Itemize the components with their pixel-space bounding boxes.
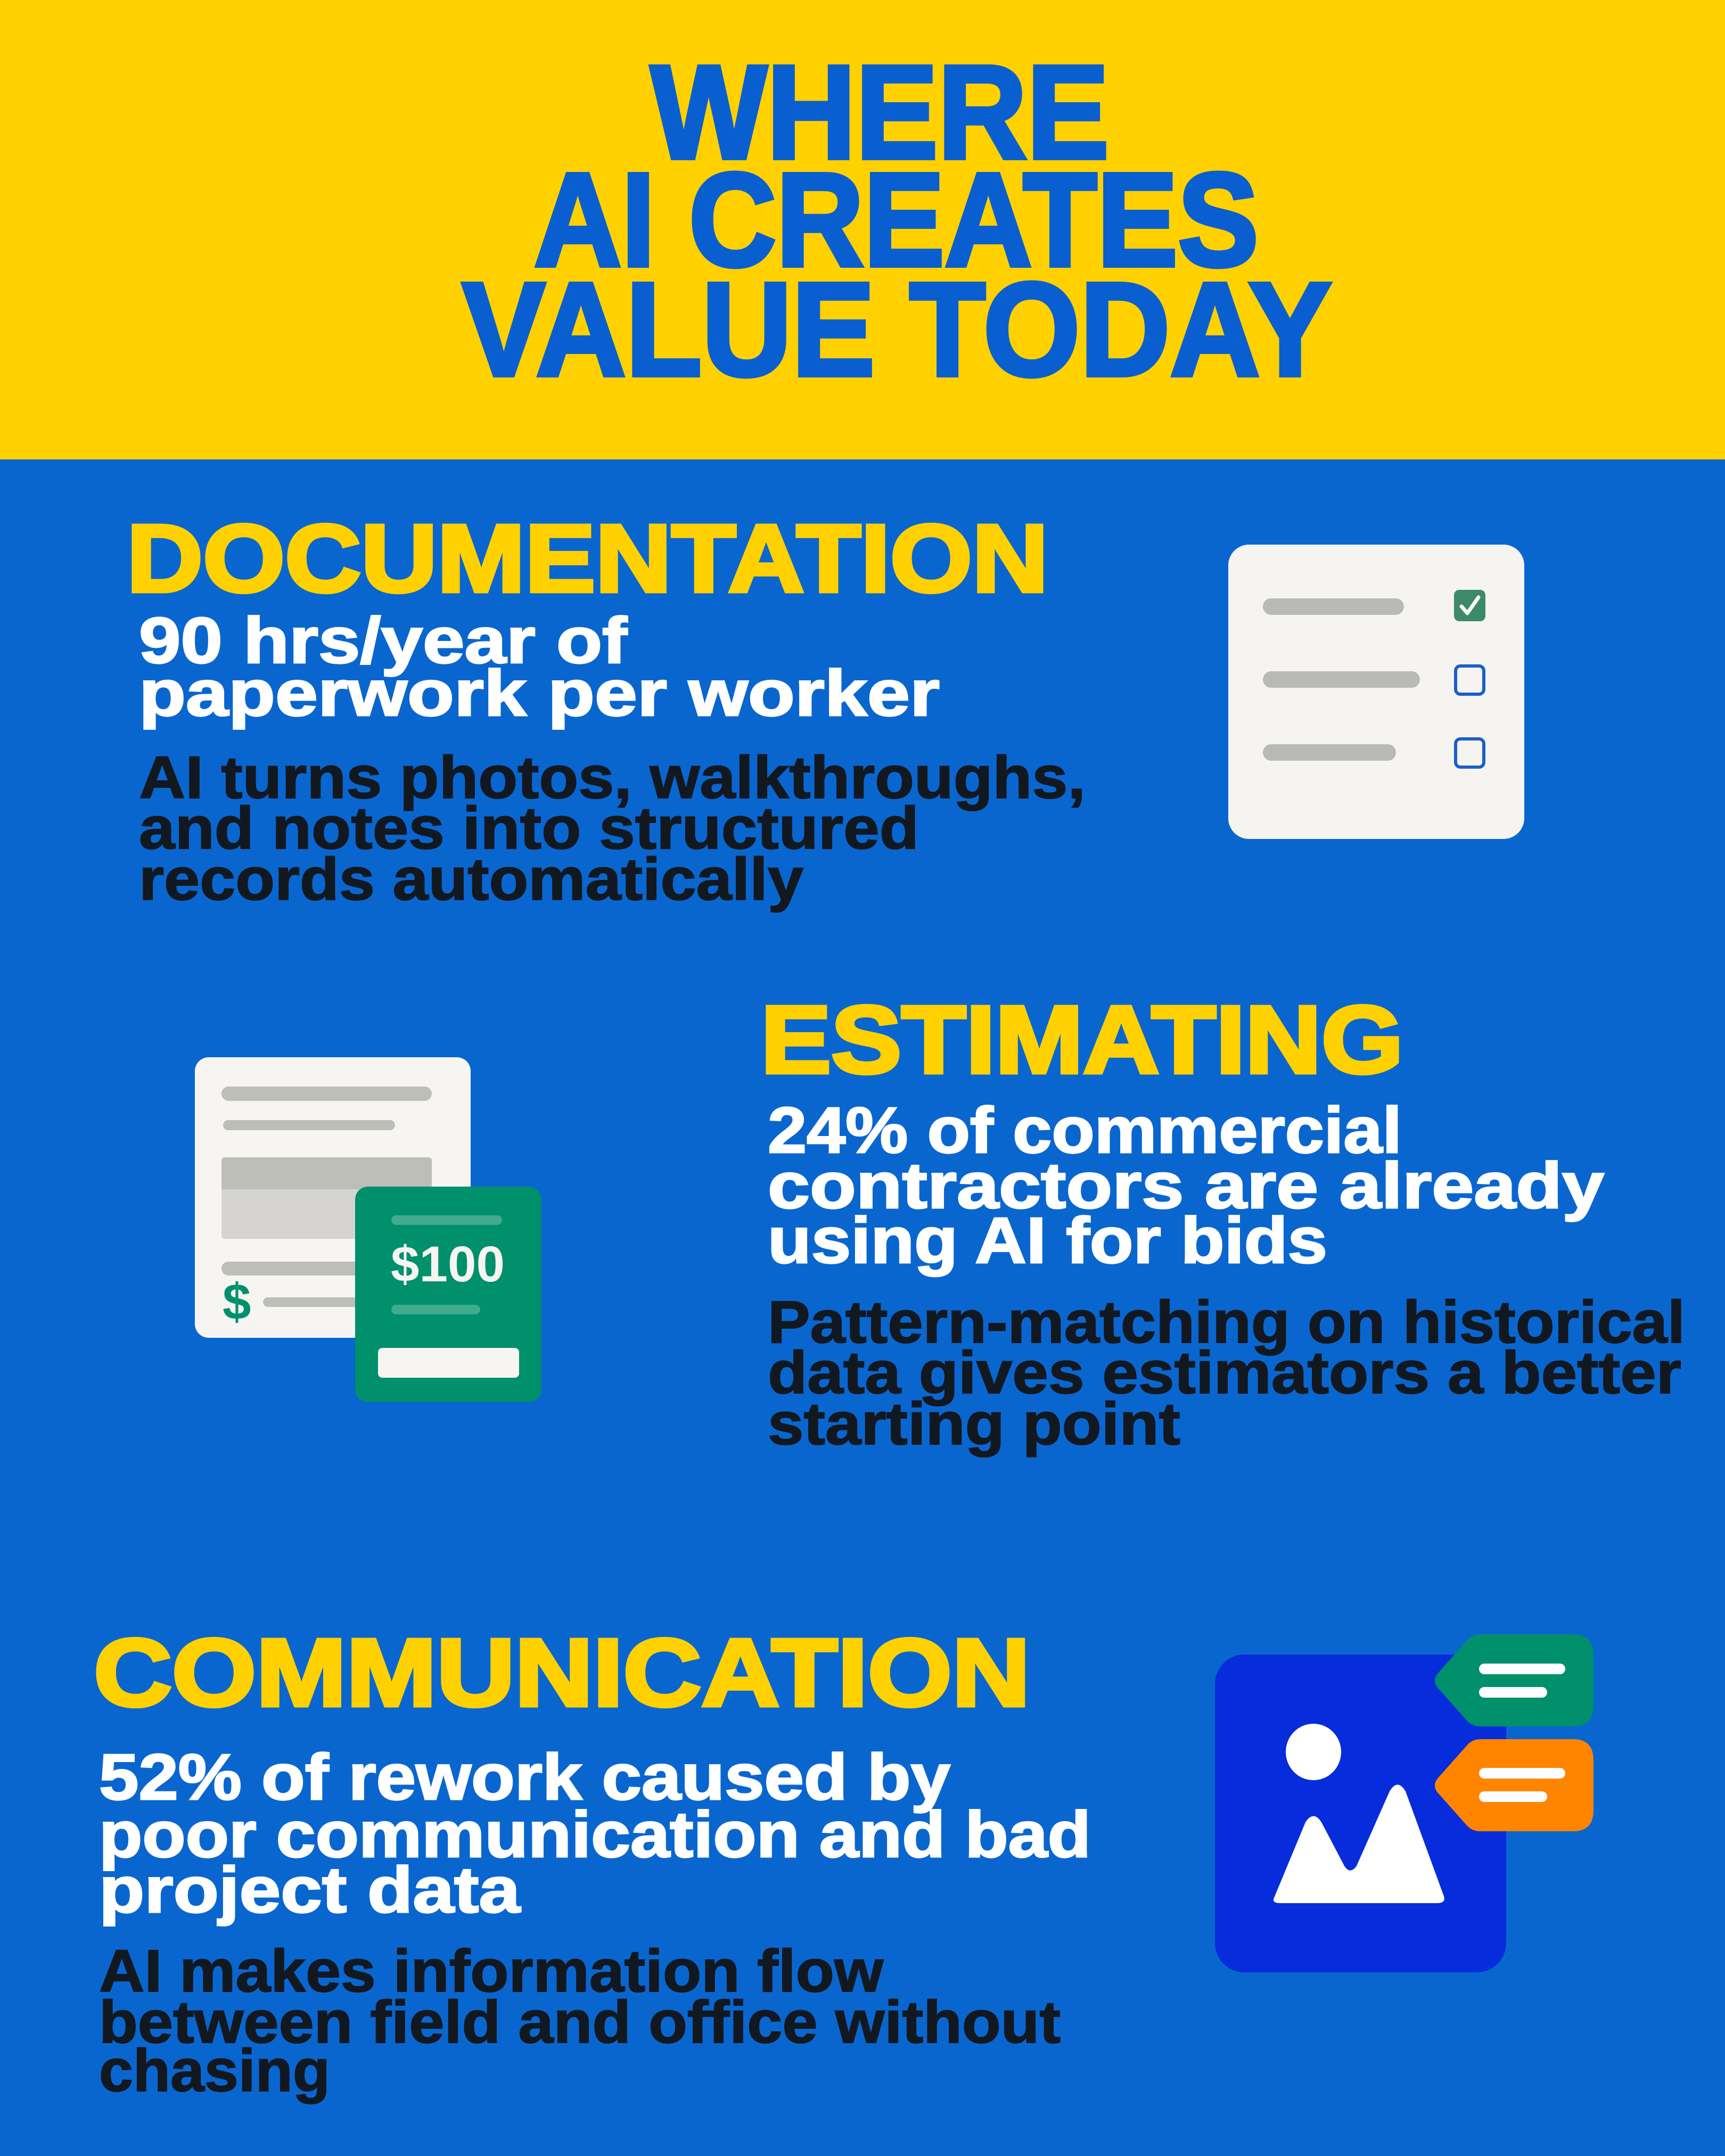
body text: documentation	[139, 744, 1086, 912]
stat: documentation: paperwork per worker	[139, 657, 940, 729]
body text: communication: between field and office without	[99, 1989, 1061, 2055]
heading: documentation: DOCUMENTATION	[127, 505, 1048, 612]
stat: documentation: 90 hrs/year of	[139, 604, 627, 677]
body text: documentation: AI turns photos, walkthroughs,	[139, 744, 1086, 811]
panel: documentation	[127, 505, 1524, 912]
icon: estimate document: $100	[391, 1236, 505, 1293]
stat: estimating	[768, 1094, 1604, 1277]
stat: estimating: contractors are already	[768, 1149, 1604, 1222]
stat: estimating: using AI for bids	[768, 1204, 1327, 1277]
body text: estimating: data gives estimators a better	[768, 1339, 1681, 1406]
title	[462, 38, 1332, 404]
title: AI CREATES	[534, 145, 1259, 294]
stat: communication	[99, 1741, 1091, 1926]
body text: communication: AI makes information flow	[99, 1938, 884, 2004]
body text: communication	[99, 1938, 1061, 2104]
title: VALUE TODAY	[462, 255, 1332, 404]
stat: communication: project data	[99, 1854, 521, 1926]
body text: communication: chasing	[99, 2037, 330, 2104]
panel: communication	[94, 1619, 1593, 2104]
icon: estimate document	[195, 1057, 541, 1402]
heading: estimating: ESTIMATING	[761, 986, 1403, 1093]
icon: estimate document: $	[223, 1273, 251, 1330]
stat: estimating: 24% of commercial	[768, 1094, 1402, 1166]
body text: documentation: and notes into structured	[139, 795, 919, 861]
body text: estimating: starting point	[768, 1390, 1180, 1457]
body text: estimating: Pattern-matching on historical	[768, 1289, 1685, 1355]
stat: communication: poor communication and bad	[99, 1798, 1091, 1871]
title banner	[0, 0, 1725, 459]
body text: documentation: records automatically	[139, 846, 803, 912]
stat: communication: 52% of rework caused by	[99, 1741, 950, 1813]
heading: communication: COMMUNICATION	[94, 1619, 1030, 1726]
body text: estimating	[768, 1289, 1685, 1457]
stat: documentation	[139, 604, 940, 729]
icon: image with chat bubbles	[1215, 1634, 1593, 1972]
panel: estimating	[195, 986, 1685, 1457]
icon: checklist	[1228, 545, 1524, 839]
title: WHERE	[651, 38, 1109, 186]
